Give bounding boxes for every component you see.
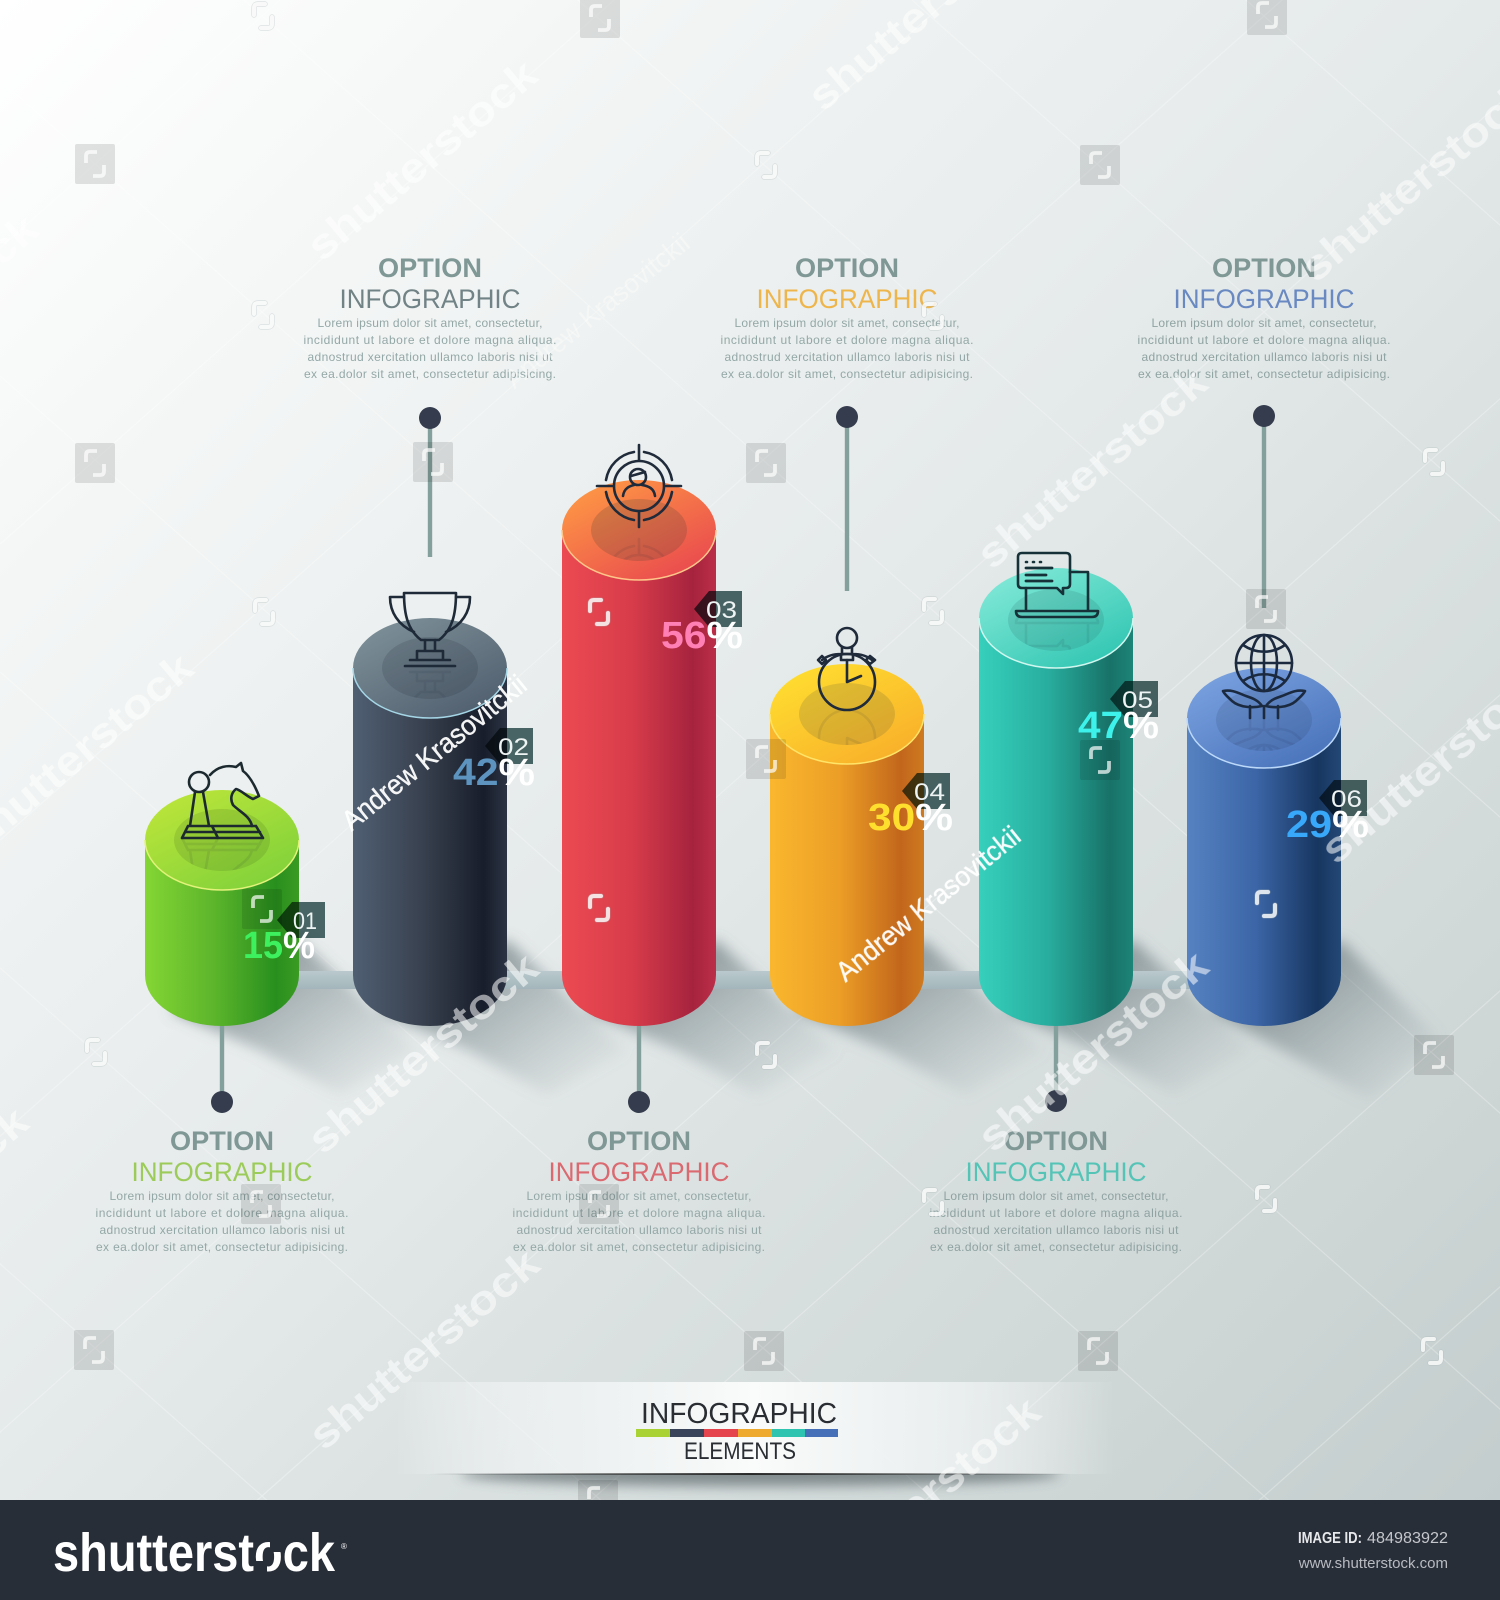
connector 04 bbox=[836, 406, 858, 591]
watermark text: shutterstock bbox=[968, 941, 1218, 1160]
cylinder 05 bbox=[979, 568, 1133, 1026]
text block 06: INFOGRAPHIC bbox=[1174, 284, 1354, 314]
text block 02 bbox=[304, 253, 556, 381]
cylinder 04 bbox=[770, 664, 924, 1026]
footer bar bbox=[0, 1500, 1500, 1600]
tag 05 bbox=[1078, 681, 1159, 747]
text block 05: ex ea.dolor sit amet, consectetur adipisicing. bbox=[930, 1240, 1182, 1254]
tag 05: 47% bbox=[1078, 705, 1159, 747]
text block 02: Lorem ipsum dolor sit amet, consectetur, bbox=[318, 316, 542, 330]
text block 01: Lorem ipsum dolor sit amet, consectetur, bbox=[110, 1189, 334, 1203]
tag 04: 30% bbox=[868, 797, 953, 839]
website: www.shutterstock.com bbox=[1298, 1555, 1448, 1572]
tag 05: 05 bbox=[1122, 687, 1153, 714]
text block 06: adnostrud xercitation ullamco laboris nisi ut bbox=[1142, 350, 1387, 364]
text block 04: OPTION bbox=[795, 253, 899, 283]
text block 03: INFOGRAPHIC bbox=[548, 1157, 730, 1187]
text block 04: INFOGRAPHIC bbox=[756, 284, 938, 314]
text block 01: OPTION bbox=[170, 1126, 274, 1156]
text block 03: Lorem ipsum dolor sit amet, consectetur, bbox=[526, 1189, 752, 1203]
tag 03: 03 bbox=[706, 597, 737, 624]
author watermarks: Andrew Krasovitckii bbox=[499, 227, 695, 394]
text block 05: INFOGRAPHIC bbox=[966, 1157, 1146, 1187]
icon: trophy bbox=[390, 593, 470, 666]
connector 06 bbox=[1253, 405, 1275, 608]
banner subtitle: ELEMENTS bbox=[684, 1438, 796, 1465]
text block 05: Lorem ipsum dolor sit amet, consectetur, bbox=[944, 1189, 1168, 1203]
banner title: INFOGRAPHIC bbox=[641, 1398, 837, 1430]
text block 04 bbox=[720, 253, 974, 381]
text block 01: incididunt ut labore et dolore magna aliqua. bbox=[96, 1206, 348, 1220]
watermark text: shutterstock bbox=[299, 1239, 549, 1458]
text block 05 bbox=[930, 1126, 1182, 1254]
icon: chess pieces bbox=[182, 763, 263, 838]
tag 06 bbox=[1286, 780, 1369, 846]
text block 06: OPTION bbox=[1212, 253, 1316, 283]
lower connector stems bbox=[220, 1024, 1058, 1102]
cylinder 01 bbox=[145, 790, 299, 1026]
text block 02: INFOGRAPHIC bbox=[340, 284, 520, 314]
text block 02: adnostrud xercitation ullamco laboris nisi ut bbox=[308, 350, 553, 364]
text block 03: adnostrud xercitation ullamco laboris nisi ut bbox=[516, 1223, 762, 1237]
text block 06: Lorem ipsum dolor sit amet, consectetur, bbox=[1152, 316, 1376, 330]
cylinder 03 bbox=[562, 480, 716, 1026]
baseline band bbox=[290, 971, 1290, 989]
tag 02 bbox=[453, 728, 535, 794]
watermark text: shutterstock bbox=[298, 943, 548, 1162]
watermark text: shutterstock bbox=[297, 50, 547, 269]
colour strip bbox=[636, 1429, 838, 1437]
shutterstock logo: shutterstock bbox=[53, 1523, 336, 1583]
text block 05: adnostrud xercitation ullamco laboris nisi ut bbox=[934, 1223, 1179, 1237]
tag 04: 04 bbox=[914, 779, 945, 806]
text block 03: ex ea.dolor sit amet, consectetur adipisicing. bbox=[513, 1240, 765, 1254]
text block 04: ex ea.dolor sit amet, consectetur adipisicing. bbox=[721, 367, 973, 381]
dot 03 bbox=[628, 1091, 650, 1113]
shutterstock logo: ® bbox=[341, 1542, 347, 1551]
tag 06: 29% bbox=[1286, 804, 1369, 846]
text block 05: OPTION bbox=[1004, 1126, 1108, 1156]
icon: target person bbox=[597, 445, 681, 527]
author watermarks: Andrew Krasovitckii bbox=[336, 669, 532, 836]
text block 05: incididunt ut labore et dolore magna aliqua. bbox=[930, 1206, 1182, 1220]
icon: laptop chat bbox=[1016, 553, 1098, 617]
tag 06: 06 bbox=[1331, 786, 1362, 813]
text block 01 bbox=[96, 1126, 348, 1254]
text block 06 bbox=[1138, 253, 1390, 381]
tag 01: 01 bbox=[293, 908, 317, 935]
author watermarks: Andrew Krasovitckii bbox=[830, 820, 1026, 987]
text block 06: incididunt ut labore et dolore magna aliqua. bbox=[1138, 333, 1390, 347]
text block 02: ex ea.dolor sit amet, consectetur adipisicing. bbox=[304, 367, 556, 381]
banner bbox=[395, 1382, 1115, 1486]
tag 01: 15% bbox=[243, 925, 315, 967]
text block 03: OPTION bbox=[587, 1126, 691, 1156]
dot 01 bbox=[211, 1091, 233, 1113]
cast shadows bbox=[170, 940, 1440, 1100]
image id number: 484983922 bbox=[1367, 1530, 1448, 1547]
text block 02: incididunt ut labore et dolore magna aliqua. bbox=[304, 333, 556, 347]
author watermarks bbox=[336, 227, 1026, 987]
text block 01: ex ea.dolor sit amet, consectetur adipisicing. bbox=[96, 1240, 348, 1254]
tag 02: 02 bbox=[498, 734, 529, 761]
icon: globe in hands bbox=[1223, 635, 1305, 718]
tag 04 bbox=[868, 773, 953, 839]
text block 04: Lorem ipsum dolor sit amet, consectetur, bbox=[734, 316, 960, 330]
tag 01 bbox=[243, 902, 325, 967]
tag 03 bbox=[661, 591, 743, 657]
text block 06: ex ea.dolor sit amet, consectetur adipisicing. bbox=[1138, 367, 1390, 381]
cylinder 06 bbox=[1187, 668, 1341, 1026]
text block 01: adnostrud xercitation ullamco laboris nisi ut bbox=[100, 1223, 345, 1237]
icon: stopwatch bbox=[818, 628, 875, 710]
dot 05 bbox=[1045, 1090, 1067, 1112]
text block 02: OPTION bbox=[378, 253, 482, 283]
text block 03: incididunt ut labore et dolore magna aliqua. bbox=[512, 1206, 766, 1220]
image id label: IMAGE ID: bbox=[1298, 1530, 1362, 1547]
tag 02: 42% bbox=[453, 752, 535, 794]
text block 04: adnostrud xercitation ullamco laboris nisi ut bbox=[724, 350, 970, 364]
cylinder 02 bbox=[353, 618, 507, 1026]
text block 04: incididunt ut labore et dolore magna aliqua. bbox=[720, 333, 974, 347]
text block 01: INFOGRAPHIC bbox=[132, 1157, 312, 1187]
connector 02 bbox=[419, 407, 441, 557]
watermark text: shutterstock bbox=[967, 358, 1217, 577]
text block 03 bbox=[512, 1126, 766, 1254]
tag 03: 56% bbox=[661, 615, 743, 657]
